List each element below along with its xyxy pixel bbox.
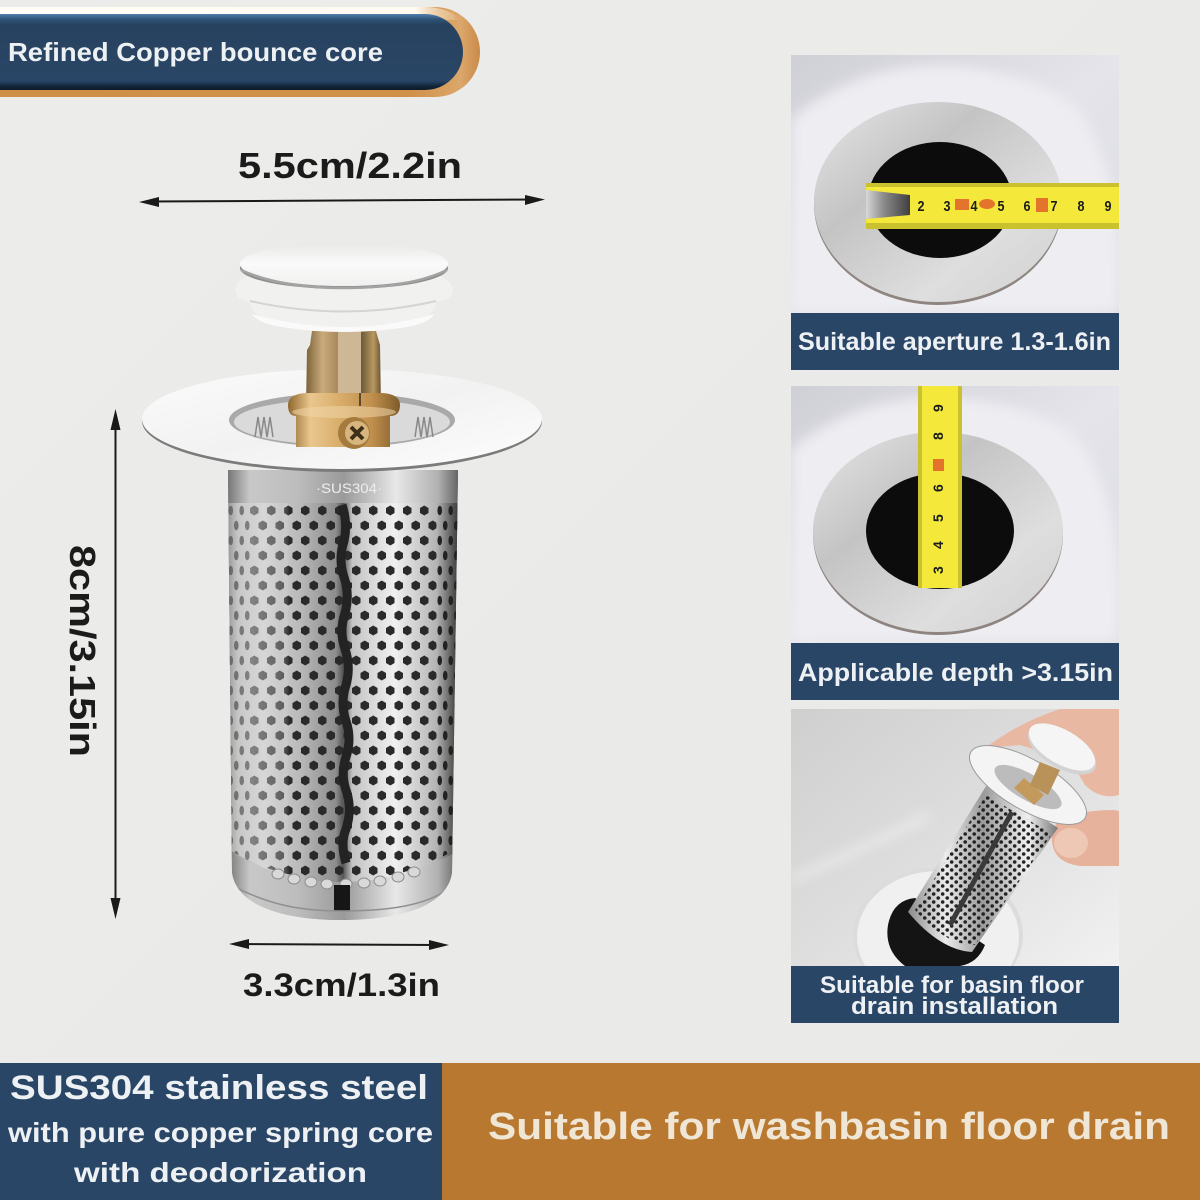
photo: tape measure across drain opening: 3 [944, 198, 950, 215]
photo: tape measure across drain opening: 8 [1078, 198, 1084, 215]
width dimension: 5.5cm/2.2in: 5.5cm/2.2in [238, 145, 462, 186]
diameter dimension: 3.3cm/1.3in: 3.3cm/1.3in [243, 967, 440, 1003]
caption bar: Suitable for basin floor [820, 972, 1084, 999]
photo: tape measure across drain opening: 7 [1050, 198, 1058, 215]
photo: tape measure in drain hole: 7 [930, 460, 946, 468]
bottom right panel: usage [442, 1063, 1200, 1200]
width dimension: 5.5cm/2.2in [139, 145, 545, 207]
photo: hand inserting strainer into drain [791, 709, 1119, 966]
photo: tape measure in drain hole: 6 [930, 484, 946, 492]
height dimension: 8cm/3.15in [62, 409, 120, 919]
bottom left panel: material: with deodorization [73, 1157, 367, 1188]
cap with silicone seal [235, 242, 453, 332]
height dimension: 8cm/3.15in: 8cm/3.15in [62, 545, 103, 757]
photo: tape measure in drain hole: 4 [930, 541, 946, 549]
tilted basket [908, 783, 1058, 952]
caption bar [791, 643, 1119, 700]
panel: applicable depth [791, 386, 1119, 700]
photo: tape measure across drain opening: 2 [918, 198, 924, 215]
caption bar [791, 966, 1119, 1023]
photo: tape measure across drain opening: 4 [970, 198, 978, 215]
photo: tape measure in drain hole: 9 [930, 404, 946, 412]
top banner: Refined Copper bounce core: Refined Copper bounce core [8, 37, 383, 67]
product: stainless strainer with copper core [142, 242, 542, 925]
panel: basin floor drain installation [791, 709, 1119, 1023]
photo: tape measure across drain opening: 6 [1024, 198, 1030, 215]
SUS304 stamp: ·SUS304· [316, 480, 382, 496]
light holes on lower edge [272, 867, 420, 889]
flange plate [142, 369, 542, 472]
photo: tape measure across drain opening [791, 55, 1119, 313]
top banner: Refined Copper bounce core [0, 7, 480, 97]
photo: tape measure in drain hole: 3 [930, 566, 946, 574]
photo: tape measure in drain hole [791, 386, 1119, 643]
photo: tape measure across drain opening: 9 [1104, 198, 1112, 215]
photo: tape measure across drain opening: 5 [998, 198, 1004, 215]
bottom left panel: material: SUS304 stainless steel [10, 1069, 428, 1107]
caption bar [791, 313, 1119, 370]
panel: suitable aperture [791, 55, 1119, 370]
caption bar: Applicable depth >3.15in [798, 659, 1113, 687]
caption bar: Suitable aperture 1.3-1.6in [798, 328, 1111, 356]
hand [985, 709, 1119, 796]
bottom left panel: material: with pure copper spring core [7, 1117, 433, 1148]
bottom left panel: material [0, 1063, 442, 1200]
tilted cap [1028, 732, 1096, 775]
photo: tape measure in drain hole: 8 [930, 432, 946, 440]
diameter dimension: 3.3cm/1.3in [229, 939, 449, 1003]
strainer basket cylinder [226, 465, 462, 925]
caption bar: drain installation [851, 993, 1058, 1020]
tilted flange [969, 745, 1087, 825]
photo: tape measure in drain hole: 5 [930, 514, 946, 522]
brass stem and collar with screw [288, 331, 400, 449]
bottom right panel: usage: Suitable for washbasin floor drain [488, 1106, 1170, 1148]
